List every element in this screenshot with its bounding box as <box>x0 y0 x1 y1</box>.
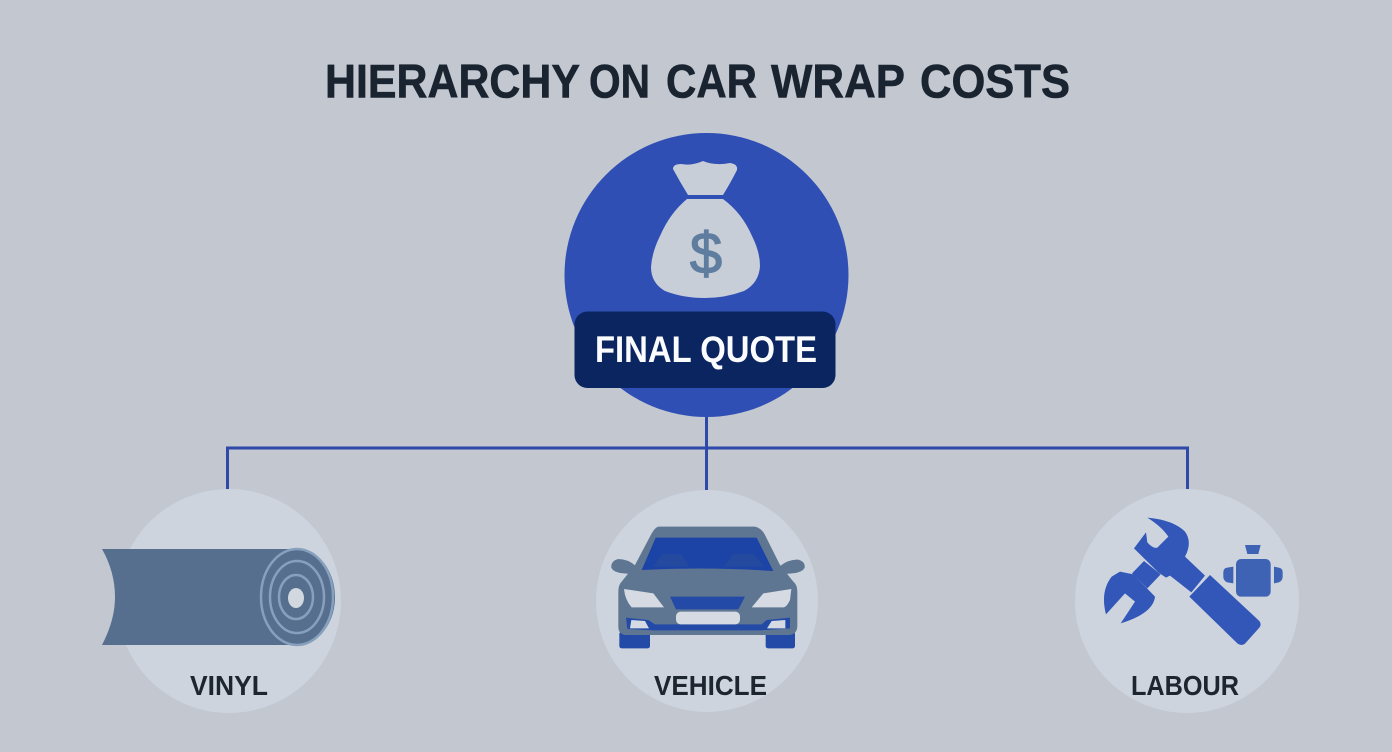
title: HIERARCHY <box>325 54 580 108</box>
labour label: LABOUR <box>1131 670 1239 701</box>
labour background circle <box>1075 489 1299 713</box>
vinyl background circle <box>117 489 341 713</box>
panel: labour <box>1075 489 1299 713</box>
title: COSTS <box>920 54 1070 108</box>
icon: vinyl roll <box>102 549 335 645</box>
icon: money bag <box>651 161 760 298</box>
title: WRAP <box>771 54 905 108</box>
panel: final quote <box>564 133 848 417</box>
panel: vinyl <box>102 489 341 713</box>
top circle <box>564 133 848 417</box>
vehicle background circle <box>596 490 818 712</box>
icon: car <box>611 527 805 648</box>
panel: vehicle <box>596 490 818 712</box>
final quote label <box>574 312 836 388</box>
icon: money bag: $ <box>690 221 722 286</box>
title <box>325 54 1070 108</box>
connector lines <box>228 414 1188 490</box>
title: ON <box>589 54 650 108</box>
title: CAR <box>666 54 757 108</box>
vehicle label: VEHICLE <box>654 670 767 701</box>
vinyl label: VINYL <box>190 670 268 701</box>
icon: wrench and motor <box>1104 518 1283 645</box>
final quote label: FINAL QUOTE <box>595 329 817 370</box>
